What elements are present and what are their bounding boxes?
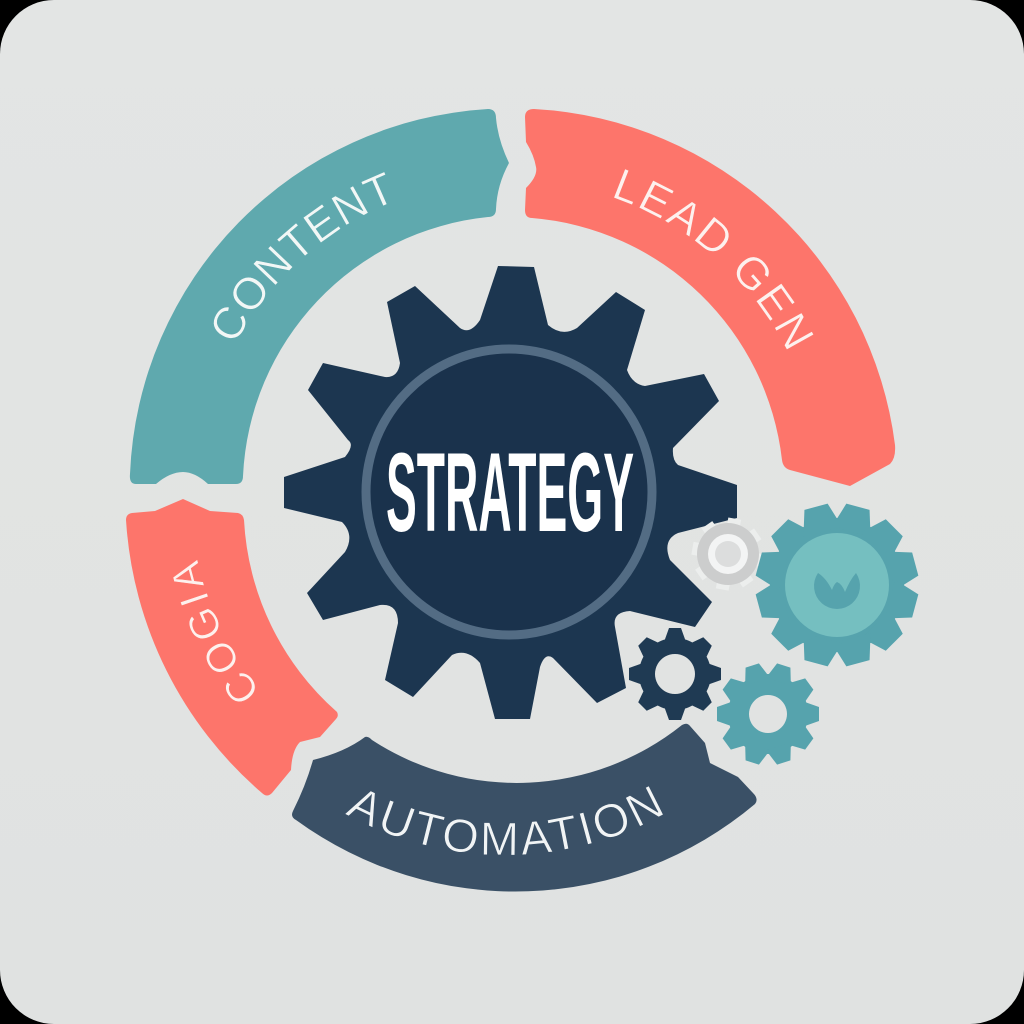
segment: cogia [126, 499, 338, 796]
central gear [284, 266, 737, 719]
icon: small dark gear [629, 628, 721, 720]
gear inner ring [366, 349, 652, 635]
icon: gray gear [691, 518, 764, 591]
icon: large teal gear [754, 502, 920, 668]
label: cogia: COGIA [173, 560, 255, 702]
label: lead gen: LEAD GEN [614, 169, 814, 350]
segment: lead gen [525, 109, 896, 486]
icon: small teal gear [717, 661, 819, 767]
central gear: STRATEGY [386, 430, 634, 555]
label: content: CONTENT [214, 172, 386, 338]
label: automation: AUTOMATION [345, 786, 663, 855]
segment: content [130, 109, 509, 484]
segment: automation [292, 724, 757, 892]
icon: gear center emblem [814, 573, 860, 609]
